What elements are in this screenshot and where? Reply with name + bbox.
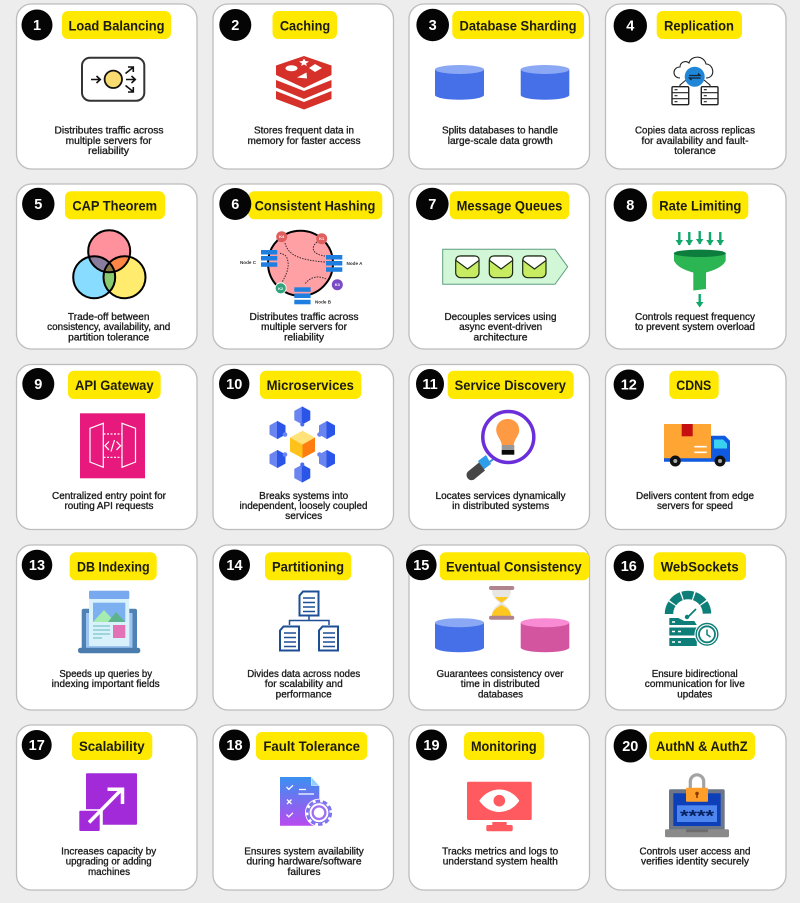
description: Ensures system availability [244, 846, 364, 858]
icon: api gateway [80, 413, 145, 478]
icon: funnel [674, 231, 726, 308]
number badge 19 [416, 730, 447, 760]
description [442, 126, 559, 147]
icon: blue database [435, 618, 484, 652]
description: Controls request frequency [635, 312, 755, 323]
description: routing API requests [64, 501, 154, 512]
number badge 12 [614, 370, 644, 400]
heading: API Gateway [68, 371, 161, 399]
description [442, 846, 559, 868]
description [247, 669, 360, 700]
icon: redis stack [276, 56, 332, 110]
number badge 19: 19 [423, 738, 440, 754]
heading: AuthN & AuthZ: AuthN & AuthZ [656, 738, 748, 754]
description: multiple servers for [261, 322, 348, 333]
number badge 16 [614, 551, 644, 581]
description: memory for faster access [248, 136, 361, 147]
heading: Microservices [260, 371, 361, 399]
number badge 16: 16 [621, 559, 637, 575]
number badge 6 [219, 188, 251, 220]
description: Decouples services using [444, 312, 556, 323]
description [52, 669, 160, 690]
panel: 4 Replication [606, 4, 786, 169]
number badge 7 [416, 188, 449, 220]
heading: DB Indexing: DB Indexing [77, 558, 150, 574]
heading: Replication [657, 11, 742, 39]
number badge 2: 2 [231, 18, 239, 34]
number badge 14: 14 [226, 558, 243, 574]
description: Delivers content from edge [636, 491, 755, 502]
icon: pink database [521, 618, 569, 652]
description: in distributed systems [452, 501, 549, 512]
heading: Eventual Consistency: Eventual Consistency [446, 558, 582, 574]
number badge 13 [22, 550, 52, 580]
number badge 1: 1 [33, 18, 41, 34]
icon: database shard two [521, 65, 569, 100]
description [635, 312, 755, 333]
description [436, 669, 564, 700]
icon: document tree [280, 592, 338, 650]
panel: 12 CDNS [606, 364, 786, 530]
description: Copies data across replicas [635, 126, 755, 136]
description [61, 846, 156, 878]
icon: hourglass [489, 586, 514, 620]
panel: 19 Monitoring [409, 725, 590, 890]
number badge 18 [219, 730, 250, 760]
heading: Rate Limiting [652, 191, 748, 219]
panel: 6 Consistent Hashing [213, 184, 394, 349]
panel: 20 AuthN & AuthZ [606, 725, 786, 890]
panel: 7 Message Queues [409, 184, 590, 349]
heading: Monitoring: Monitoring [471, 738, 537, 754]
panel: 5 CAP Theorem [16, 184, 197, 349]
heading: WebSockets: WebSockets [661, 558, 739, 574]
icon: magnifier with bulb [467, 412, 534, 480]
heading: Rate Limiting: Rate Limiting [659, 198, 741, 214]
description: indexing important fields [52, 679, 160, 690]
heading: Database Sharding: Database Sharding [460, 17, 576, 33]
number badge 18: 18 [226, 738, 243, 754]
number badge 14 [219, 550, 250, 580]
description: reliability [284, 332, 324, 344]
heading: Load Balancing [62, 11, 171, 39]
number badge 20: 20 [622, 739, 638, 755]
description: Ensure bidirectional [652, 669, 738, 680]
number badge 9 [22, 368, 54, 400]
panel: 18 Fault Tolerance [213, 725, 394, 890]
icon: microservices hexagons [270, 407, 334, 482]
description: databases [478, 690, 523, 700]
description: large-scale data growth [448, 136, 553, 147]
description [52, 491, 167, 512]
description: Trade-off between [68, 312, 149, 323]
number badge 11 [416, 369, 444, 399]
description [244, 846, 364, 878]
description [640, 846, 750, 868]
panel: 10 Microservices [213, 364, 394, 530]
number badge 12: 12 [621, 378, 637, 394]
description: architecture [474, 332, 528, 344]
description: Centralized entry point for [52, 491, 167, 502]
panel: 3 Database Sharding [409, 4, 590, 169]
panel: 11 Service Discovery [409, 364, 590, 530]
panel: 9 API Gateway [16, 364, 197, 530]
heading: Microservices: Microservices [267, 377, 354, 393]
heading: CAP Theorem: CAP Theorem [72, 198, 157, 214]
icon: hash ring: K4 [279, 234, 285, 239]
number badge 3: 3 [429, 18, 437, 34]
icon: delivery truck [664, 424, 730, 466]
icon: document with gear [280, 777, 333, 827]
panel: 14 Partitioning [213, 545, 394, 710]
number badge 10 [219, 369, 249, 399]
description: upgrading or adding [66, 856, 152, 868]
icon: laptop with padlock: **** [680, 806, 714, 826]
panel: 16 WebSockets [606, 545, 786, 710]
description [47, 312, 170, 344]
heading: Eventual Consistency [440, 552, 589, 580]
number badge 1 [22, 10, 52, 40]
panel: 2 Caching [213, 4, 394, 169]
description: async event-driven [459, 322, 542, 333]
number badge 20 [614, 729, 647, 762]
description: understand system health [443, 856, 558, 868]
icon: venn diagram [73, 230, 146, 298]
description: Tracks metrics and logs to [442, 846, 559, 858]
icon: database shard one [435, 65, 484, 100]
description: updates [677, 690, 712, 700]
heading: Load Balancing: Load Balancing [68, 17, 164, 33]
description [635, 126, 755, 157]
description: Breaks systems into [259, 491, 349, 502]
description: tolerance [674, 146, 716, 157]
heading: Replication: Replication [664, 17, 734, 33]
number badge 4 [614, 9, 647, 42]
icon: hash ring: K1 [319, 236, 325, 241]
description: reliability [88, 146, 129, 157]
number badge 6: 6 [231, 197, 239, 213]
number badge 15 [406, 550, 437, 580]
icon: hash ring: Node A [347, 261, 363, 266]
heading: Service Discovery: Service Discovery [455, 377, 566, 393]
description: performance [276, 690, 332, 700]
description: Divides data across nodes [247, 669, 360, 680]
heading: Partitioning [265, 552, 351, 580]
description: consistency, availability, and [47, 322, 170, 333]
heading: Fault Tolerance [256, 732, 367, 760]
description [436, 491, 566, 512]
number badge 17 [22, 730, 52, 760]
icon: laptop with document [78, 591, 140, 653]
description: Speeds up queries by [59, 669, 152, 680]
number badge 4: 4 [626, 19, 634, 35]
description: multiple servers for [66, 136, 152, 147]
heading: CAP Theorem [65, 191, 165, 219]
heading: Consistent Hashing [248, 191, 382, 219]
icon: hash ring [240, 231, 363, 305]
description: machines [88, 867, 130, 878]
number badge 11: 11 [422, 377, 438, 393]
description: Increases capacity by [61, 846, 156, 858]
description: independent, loosely coupled [240, 501, 368, 512]
icon: monitor with eye [467, 782, 532, 831]
description: for availability and fault- [642, 136, 748, 147]
heading: Message Queues [450, 191, 569, 219]
heading: WebSockets [654, 552, 746, 580]
description: Stores frequent data in [254, 126, 354, 136]
description: to prevent system overload [635, 322, 755, 333]
heading: Partitioning: Partitioning [272, 558, 344, 574]
heading: API Gateway: API Gateway [75, 377, 154, 393]
description: Guarantees consistency over [436, 669, 564, 680]
description [250, 312, 359, 344]
panel: 15 Eventual Consistency [406, 545, 590, 710]
heading: Fault Tolerance: Fault Tolerance [263, 738, 360, 754]
number badge 9: 9 [34, 377, 42, 393]
icon: message queue [443, 249, 568, 284]
description [645, 669, 745, 700]
number badge 10: 10 [226, 377, 242, 393]
heading: Message Queues: Message Queues [457, 198, 563, 214]
heading: CDNS [669, 371, 719, 399]
description [444, 312, 556, 344]
heading: Scalability [72, 732, 152, 760]
heading: Monitoring [464, 732, 544, 760]
icon: scale up arrow [78, 773, 137, 833]
description: for scalability and [265, 679, 343, 690]
description: time in distributed [461, 679, 540, 690]
icon: hash ring: Node C [240, 260, 257, 265]
number badge 13: 13 [29, 558, 45, 574]
heading: DB Indexing [70, 552, 157, 580]
icon: laptop with padlock [665, 775, 729, 837]
description [636, 491, 755, 512]
number badge 17: 17 [29, 738, 45, 754]
description: Splits databases to handle [442, 126, 559, 136]
description [248, 126, 361, 147]
number badge 2 [219, 9, 251, 41]
description [240, 491, 368, 522]
number badge 7: 7 [428, 197, 436, 213]
heading: Service Discovery [448, 371, 574, 399]
icon: gauge server clock [669, 595, 720, 647]
heading: Scalability: Scalability [79, 738, 145, 754]
icon: hash ring: K3 [335, 282, 341, 287]
description: verifies identity securely [641, 856, 749, 868]
icon: hash ring: K2 [278, 286, 284, 291]
heading: Database Sharding [452, 11, 584, 39]
number badge 5 [22, 188, 54, 220]
number badge 8: 8 [626, 198, 634, 214]
heading: AuthN & AuthZ [649, 732, 755, 760]
panel: 17 Scalability [16, 725, 197, 890]
description: partition tolerance [68, 332, 150, 344]
icon: load balancer [82, 58, 144, 101]
description: Controls user access and [640, 846, 750, 858]
number badge 8 [614, 188, 647, 222]
description: failures [288, 867, 321, 878]
panel: 1 Load Balancing [16, 4, 197, 169]
heading: Consistent Hashing: Consistent Hashing [255, 198, 375, 214]
description: services [285, 511, 322, 522]
description: during hardware/software [246, 856, 362, 868]
description: communication for live [645, 679, 745, 690]
heading: Caching: Caching [280, 17, 330, 33]
description: Locates services dynamically [436, 491, 566, 502]
panel: 8 Rate Limiting [606, 184, 786, 349]
icon: hash ring: Node B [315, 300, 332, 305]
number badge 3 [416, 9, 449, 41]
description: Distributes traffic across [54, 126, 164, 136]
number badge 5: 5 [34, 197, 42, 213]
panel: 13 DB Indexing [16, 545, 197, 710]
heading: Caching [272, 11, 337, 39]
icon: cloud replication [672, 57, 718, 105]
description [54, 126, 164, 157]
heading: CDNS: CDNS [676, 377, 711, 393]
description: servers for speed [657, 501, 733, 512]
number badge 15: 15 [413, 558, 429, 574]
description: Distributes traffic across [250, 312, 359, 323]
